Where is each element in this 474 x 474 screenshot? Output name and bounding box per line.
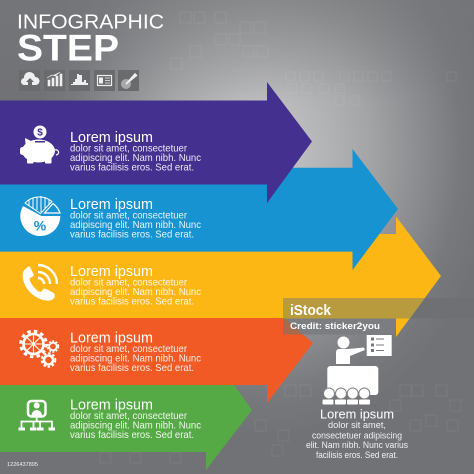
text block: step 3: Lorem ipsum [70, 264, 153, 280]
icon: id card [94, 70, 115, 91]
icon: organisation chart [18, 401, 55, 430]
icon: gears [21, 331, 58, 367]
text block: step 5: varius facilisis eros. Sed erat. [70, 430, 194, 441]
watermark: iStock credit: Credit: sticker2you [290, 321, 380, 332]
text block: step 4: dolor sit amet, consectetuer [70, 344, 188, 355]
text block: step 3: varius facilisis eros. Sed erat. [70, 296, 194, 308]
arrow: orange step 4 [0, 318, 313, 403]
icon: presenter with audience [322, 335, 392, 404]
icon: pie chart: % [34, 218, 47, 234]
title [17, 10, 164, 68]
title: INFOGRAPHIC [17, 10, 164, 34]
text block: step 1 [70, 130, 201, 174]
text block: step 4 [70, 330, 201, 374]
text block: step 4: Lorem ipsum [70, 330, 153, 346]
icon: target tool [118, 70, 139, 91]
text block: step 1: varius facilisis eros. Sed erat. [70, 162, 194, 174]
text block: step 5 [70, 398, 201, 441]
text block: step 1: adipiscing elit. Nam nibh. Nunc [70, 153, 201, 164]
text block: step 2: Lorem ipsum [70, 197, 153, 213]
arrow: green step 5 [0, 385, 252, 470]
title: STEP [17, 28, 119, 68]
text block: step 3: dolor sit amet, consectetuer [70, 278, 188, 288]
arrow: purple step 1 [0, 82, 312, 203]
text block: step 5: dolor sit amet, consectetuer [70, 411, 188, 422]
icon: bar growth [44, 70, 65, 91]
text block: step 4: varius facilisis eros. Sed erat. [70, 363, 194, 374]
icon: pie chart [20, 196, 60, 236]
arrow: blue step 2 [0, 149, 398, 270]
text block: presenter caption [306, 406, 408, 460]
icon: piggy bank: $ [37, 128, 43, 138]
text block: step 3 [70, 264, 201, 308]
text block: presenter caption: consectetuer adipiscing [312, 430, 402, 440]
text block: step 1: dolor sit amet, consectetuer [70, 144, 188, 154]
text block: presenter caption: Lorem ipsum [320, 406, 394, 422]
text block: step 3: adipiscing elit. Nam nibh. Nunc [70, 287, 201, 298]
icon: piggy bank [20, 126, 59, 164]
text block: step 2: adipiscing elit. Nam nibh. Nunc [70, 220, 201, 231]
text block: step 2 [70, 197, 201, 240]
text block: step 1: Lorem ipsum [70, 130, 153, 146]
text block: presenter caption: elit. Nam nibh. Nunc varius [306, 440, 408, 450]
text block: presenter caption: dolor sit amet, [328, 420, 386, 430]
icon row [19, 70, 139, 91]
image id: 1226437895 [7, 462, 38, 468]
arrow: yellow step 3 [0, 216, 441, 337]
icon: phone [23, 265, 57, 301]
icon: bar chart [69, 70, 90, 91]
watermark: iStock credit: iStock [290, 303, 332, 319]
text block: step 2: varius facilisis eros. Sed erat. [70, 230, 194, 240]
text block: step 4: adipiscing elit. Nam nibh. Nunc [70, 354, 201, 364]
text block: step 5: Lorem ipsum [70, 398, 153, 414]
text block: presenter caption: facilisis eros. Sed erat. [316, 450, 398, 460]
watermark: iStock credit [283, 298, 474, 334]
text block: step 2: dolor sit amet, consectetuer [70, 210, 188, 222]
text block: step 5: adipiscing elit. Nam nibh. Nunc [70, 420, 201, 432]
icon: cloud upload [19, 70, 40, 91]
